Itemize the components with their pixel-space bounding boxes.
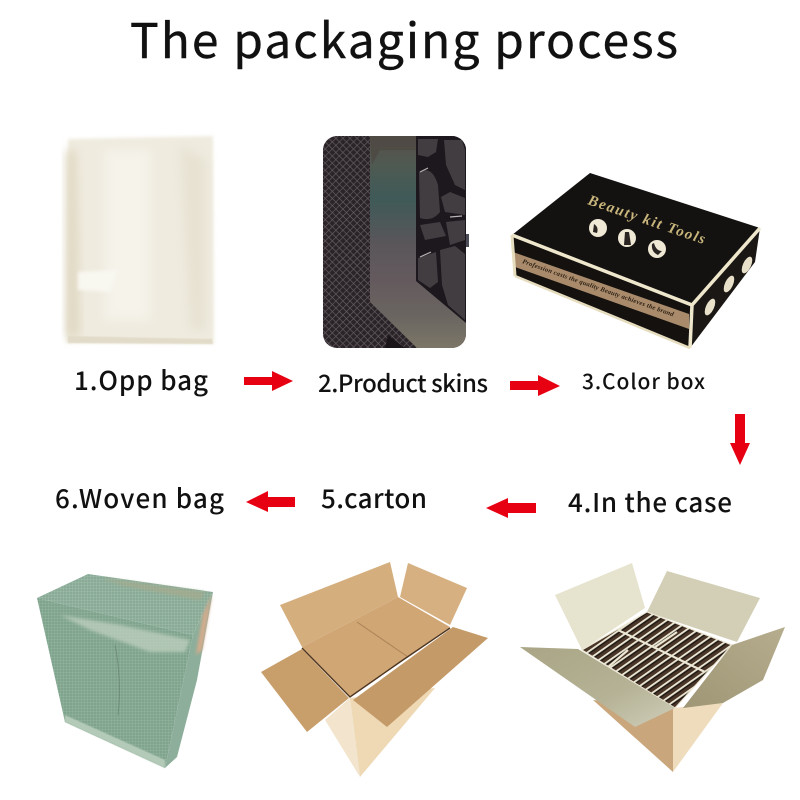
box lid lettering: Beauty kit Tools: [585, 192, 707, 248]
label: step 5: 5.carton: [321, 479, 427, 516]
title: The packaging process: [130, 2, 678, 72]
image: color box: [512, 173, 760, 348]
image: woven bag: [37, 574, 213, 768]
packed color boxes: [582, 612, 732, 708]
label: step 3: 3.Color box: [582, 366, 705, 396]
image: carton with color boxes: [520, 563, 785, 772]
arrow: skins to color box: [510, 375, 560, 396]
label: step 1: 1.Opp bag: [74, 361, 208, 398]
label: step 2: 2.Product skins: [318, 364, 488, 399]
label: step 4: 4.In the case: [568, 483, 732, 520]
image: open carton: [261, 562, 488, 777]
arrow: carton to woven bag: [246, 491, 295, 512]
box band lettering: Profession casts the quality Beauty achieves the brand: [521, 258, 675, 319]
image: opp bag: [66, 136, 214, 344]
arrow: case to carton: [486, 498, 536, 518]
arrow: bag to skins: [244, 371, 293, 391]
label: step 6: 6.Woven bag: [55, 479, 224, 516]
image: product skin case: [323, 136, 469, 348]
arrow: down to case: [730, 414, 750, 465]
